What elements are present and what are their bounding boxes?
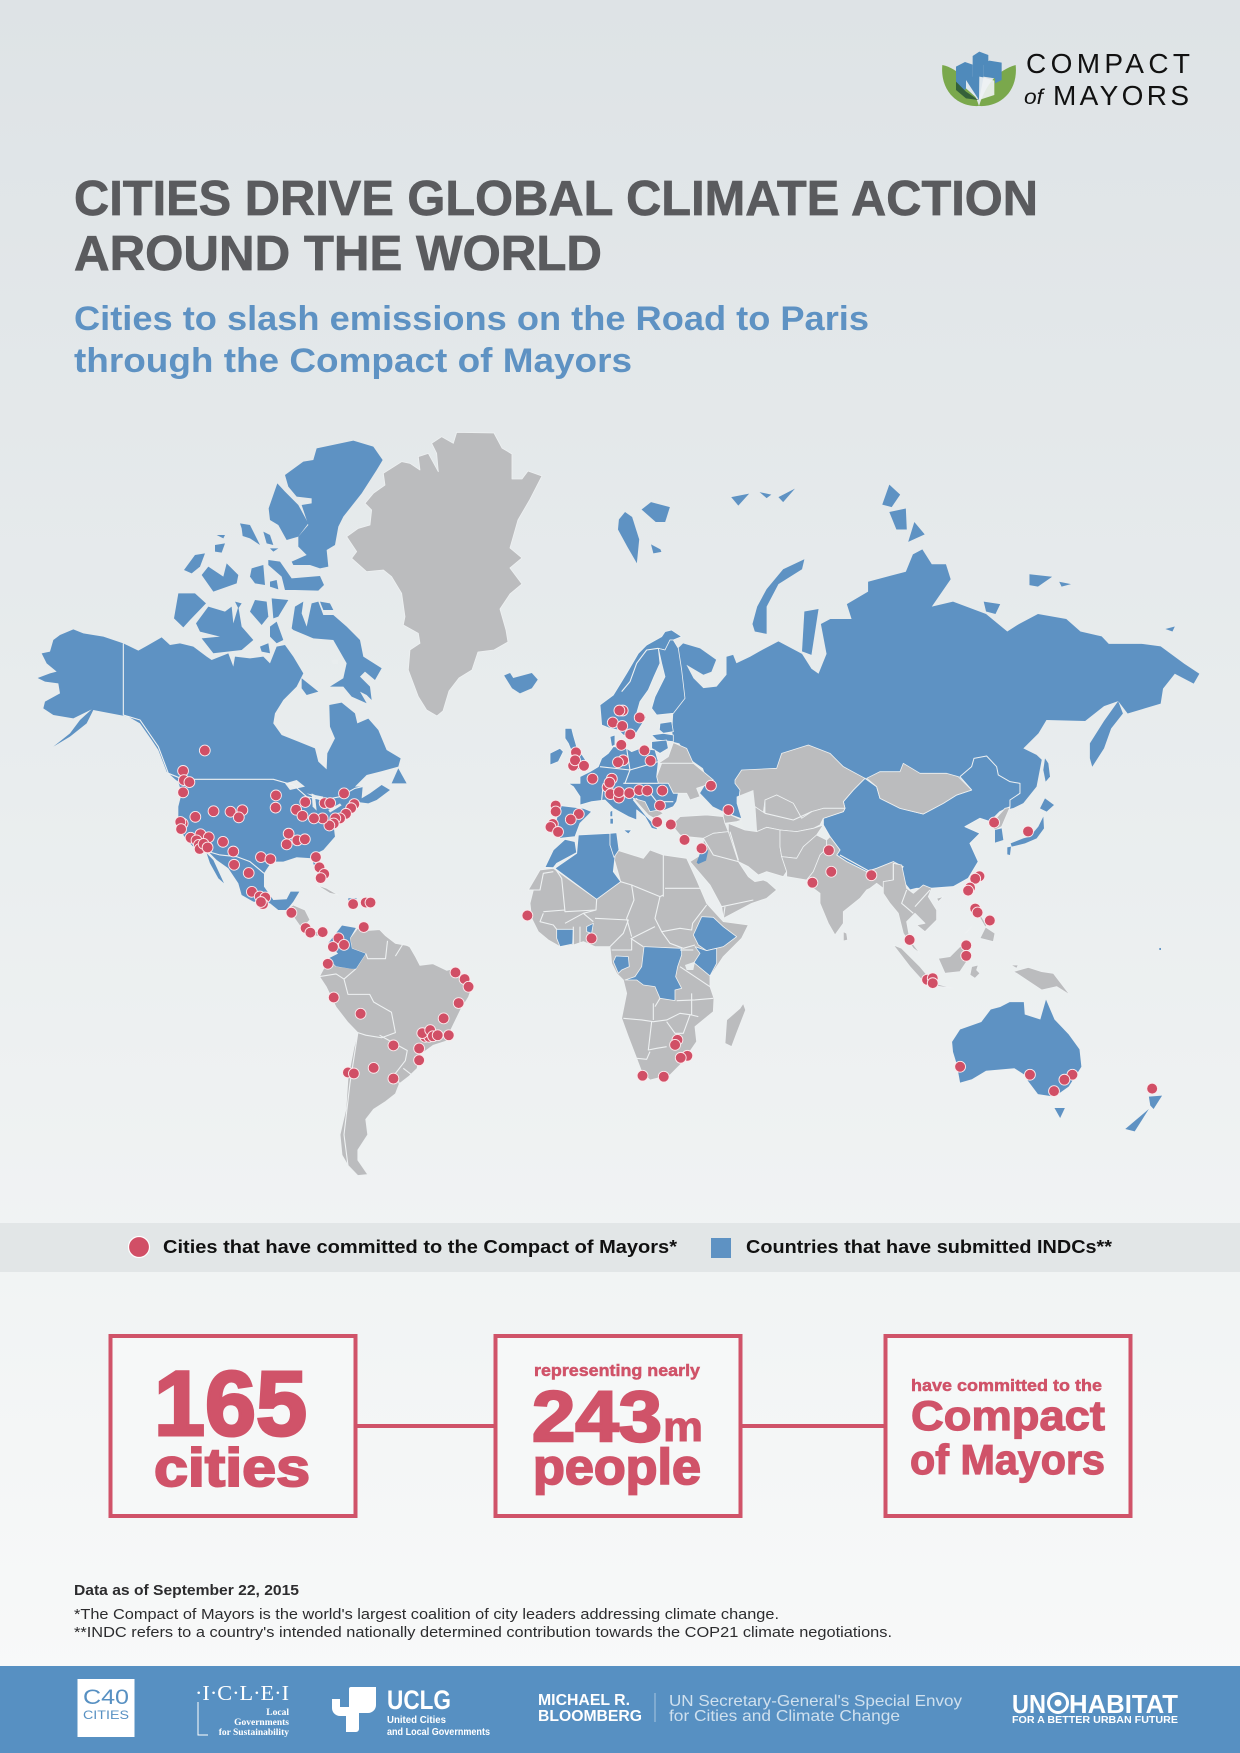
map: Europe bbox=[550, 630, 713, 838]
Belarus bbox=[658, 743, 693, 763]
partner logo: UCLG: and Local Governments bbox=[387, 1727, 490, 1738]
stat box: Compact of Mayors: of Mayors bbox=[910, 1436, 1105, 1483]
legend: Cities that have committed to the Compact of Mayors* bbox=[163, 1236, 678, 1257]
title bbox=[74, 172, 1038, 281]
title: CITIES DRIVE GLOBAL CLIMATE ACTION bbox=[74, 172, 1038, 226]
footnotes: Data as of September 22, 2015 bbox=[74, 1583, 299, 1599]
partner logo: C40 Cities bbox=[78, 1679, 134, 1737]
Vancouver Island bbox=[167, 772, 178, 781]
Russia bbox=[672, 549, 1199, 818]
city markers: Americas bbox=[175, 745, 474, 1084]
Kamchatka bbox=[1090, 701, 1123, 767]
partner logo: Michael R. Bloomberg: MICHAEL R. bbox=[538, 1692, 630, 1709]
map: North America bbox=[38, 629, 407, 937]
partner logo: C40 Cities: C40 bbox=[83, 1686, 129, 1709]
partner logo: Michael R. Bloomberg: UN Secretary-General's Special Envoy bbox=[669, 1693, 962, 1710]
stat box: Compact of Mayors bbox=[886, 1336, 1130, 1516]
stat box: Compact of Mayors: have committed to the bbox=[911, 1376, 1102, 1395]
Ukraine bbox=[657, 763, 713, 800]
Jordan bbox=[697, 850, 708, 864]
Central America bbox=[287, 905, 327, 937]
subtitle: Cities to slash emissions on the Road to Paris bbox=[74, 300, 869, 338]
stat box: 243m people: representing nearly bbox=[534, 1361, 701, 1380]
partner logo: ICLEI: ·I·C·L·E·I bbox=[195, 1681, 289, 1705]
Mongolia bbox=[867, 763, 972, 814]
legend bbox=[0, 1223, 1240, 1272]
partner logo: C40 Cities: CITIES bbox=[83, 1710, 129, 1722]
partner logo: ICLEI: Local bbox=[266, 1708, 289, 1718]
Baja California bbox=[207, 853, 224, 883]
New Zealand bbox=[1149, 1096, 1162, 1109]
United Kingdom bbox=[565, 728, 587, 772]
Arabia bbox=[690, 832, 777, 918]
logo: Compact of Mayors: COMPACT bbox=[1026, 48, 1190, 79]
subtitle bbox=[74, 300, 869, 380]
Sulawesi bbox=[970, 965, 980, 978]
stat box: 165 cities bbox=[110, 1336, 356, 1516]
Continental Europe bbox=[568, 747, 678, 830]
Caucasus bbox=[723, 812, 742, 823]
stat box: 165 cities: 165 bbox=[154, 1353, 307, 1455]
Denmark bbox=[610, 735, 615, 747]
partner logo: UN-Habitat bbox=[1012, 1689, 1178, 1726]
legend: INDC swatch bbox=[711, 1238, 731, 1258]
partner logo: Michael R. Bloomberg: BLOOMBERG bbox=[538, 1708, 642, 1725]
title: AROUND THE WORLD bbox=[74, 227, 602, 281]
partner logo: ICLEI bbox=[195, 1681, 289, 1738]
Kazakhstan bbox=[735, 745, 865, 818]
Spain and Portugal bbox=[550, 805, 592, 838]
Australia bbox=[952, 1000, 1081, 1097]
Philippines bbox=[973, 903, 995, 942]
Indochina bbox=[883, 863, 937, 953]
Great Lakes bbox=[285, 659, 342, 813]
partner logo: UCLG: United Cities bbox=[387, 1715, 446, 1726]
India bbox=[807, 837, 903, 935]
footnotes bbox=[74, 1583, 892, 1641]
Cuba bbox=[317, 885, 338, 895]
city markers: Europe, Africa, Asia, Oceania bbox=[522, 705, 1158, 1097]
Borneo bbox=[938, 945, 970, 973]
Caspian Sea bbox=[737, 790, 757, 832]
stat box: Compact of Mayors: Compact bbox=[911, 1392, 1105, 1439]
logo: Compact of Mayors: MAYORS bbox=[1053, 80, 1189, 111]
Turkey bbox=[672, 815, 728, 838]
stat box: 243m people bbox=[496, 1336, 740, 1516]
partner logo: ICLEI: Governments bbox=[234, 1718, 289, 1728]
world map bbox=[38, 432, 1199, 1176]
legend: Countries that have submitted INDCs** bbox=[746, 1236, 1113, 1257]
connector lines bbox=[357, 1424, 884, 1428]
map: Asia bbox=[672, 745, 1020, 988]
partner logo: UN-Habitat: FOR A BETTER URBAN FUTURE bbox=[1012, 1714, 1178, 1726]
Pakistan bbox=[782, 835, 827, 880]
map: Africa bbox=[528, 833, 748, 1080]
Mediterranean islands bbox=[610, 810, 613, 817]
Sri Lanka bbox=[843, 932, 848, 941]
Iran bbox=[728, 823, 787, 877]
partner logo: UN-Habitat: HABITAT bbox=[1069, 1689, 1178, 1719]
China bbox=[823, 756, 1020, 890]
Newfoundland bbox=[392, 768, 407, 783]
Hispaniola bbox=[348, 898, 357, 903]
Central Asia bbox=[755, 795, 845, 832]
subtitle: through the Compact of Mayors bbox=[74, 342, 632, 380]
footer band bbox=[0, 1666, 1240, 1753]
stat box: 165 cities: cities bbox=[154, 1438, 310, 1498]
Ireland bbox=[550, 748, 563, 765]
footnotes: *The Compact of Mayors is the world's largest coalition of city leaders addressing climate change. bbox=[74, 1606, 779, 1623]
Finland bbox=[652, 640, 685, 715]
Colombia bbox=[328, 926, 366, 969]
map: Russia, Arctic islands and Oceania bbox=[618, 485, 1199, 1131]
partner logo: UN-Habitat: UN bbox=[1012, 1689, 1046, 1719]
Sumatra bbox=[893, 945, 928, 983]
Java bbox=[928, 982, 953, 988]
Balkans non-submitters bbox=[633, 798, 663, 818]
Tasmania bbox=[1054, 1108, 1065, 1118]
stat box: 243m people: 243 bbox=[532, 1378, 662, 1457]
map: East Asia and New Guinea bbox=[990, 758, 1161, 995]
legend: city marker bbox=[128, 1236, 150, 1258]
logo: Compact of Mayors: of bbox=[1024, 86, 1045, 109]
stat box: 243m people: people bbox=[533, 1439, 701, 1495]
partner logo: UCLG bbox=[332, 1685, 490, 1738]
map: Greenland and Canadian Arctic bbox=[174, 432, 542, 716]
partner logo: Michael R. Bloomberg bbox=[538, 1692, 962, 1725]
stat box: 243m people: m bbox=[663, 1403, 703, 1450]
footnotes: **INDC refers to a country's intended nationally determined contribution towards the COP21 climate negotiations. bbox=[74, 1624, 892, 1641]
Afghanistan bbox=[780, 825, 823, 858]
Baltics bbox=[659, 722, 673, 733]
map: South America and Iceland bbox=[319, 673, 538, 1176]
partner logo: Michael R. Bloomberg: for Cities and Climate Change bbox=[669, 1708, 900, 1725]
partner logo: UCLG: UCLG bbox=[387, 1685, 451, 1715]
logo: Compact of Mayors bbox=[942, 48, 1190, 111]
partner logo: ICLEI: for Sustainability bbox=[219, 1728, 289, 1738]
Norway and Sweden bbox=[600, 630, 682, 740]
